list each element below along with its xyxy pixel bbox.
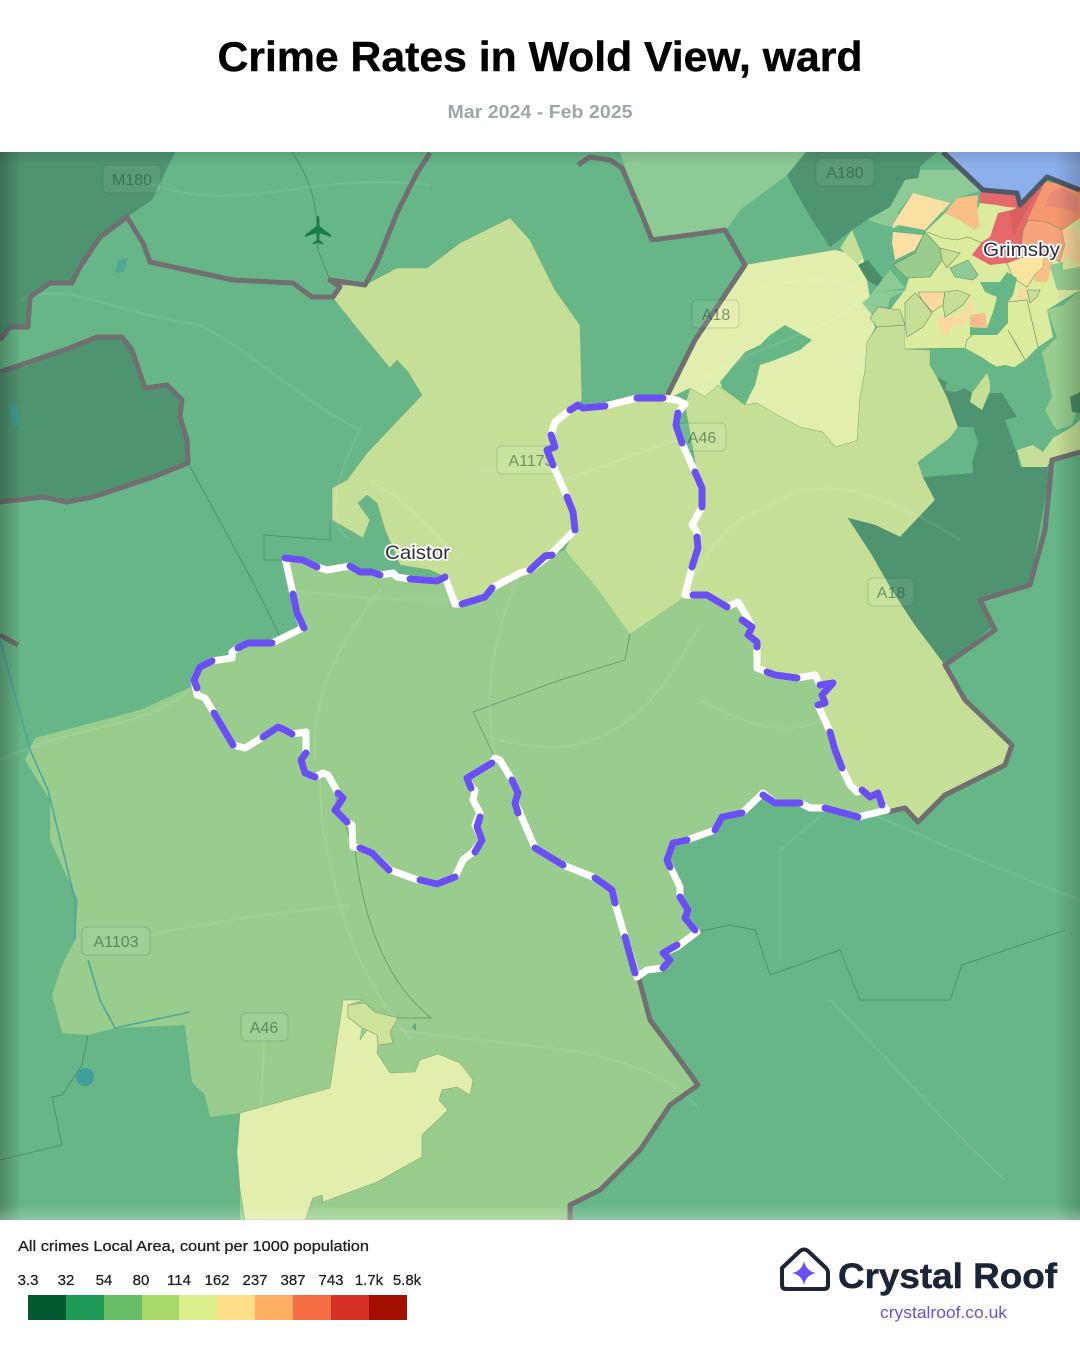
water bodies <box>8 258 416 1086</box>
administrative boundaries <box>0 152 1080 1220</box>
road label: A1103 <box>82 927 150 955</box>
sea <box>946 152 1080 200</box>
legend scale labels: 54 <box>96 1272 112 1289</box>
brand logo <box>782 1250 1057 1322</box>
ward: Wold View fill <box>194 550 887 977</box>
legend scale labels: 32 <box>58 1272 74 1289</box>
region: Caistor and north wold <box>332 218 582 605</box>
roads and thin boundaries <box>0 180 1080 1180</box>
region: south pale yellow <box>237 1000 473 1220</box>
region: pale yellow east of A46 <box>665 250 875 447</box>
road label: A18 north: A18 <box>702 307 730 324</box>
legend scale labels: 80 <box>133 1272 149 1289</box>
region: west darker area <box>0 337 188 502</box>
region: A180 darker area <box>787 152 937 247</box>
legend scale labels: 743 <box>318 1272 344 1289</box>
legend title: All crimes Local Area, count per 1000 population <box>18 1238 369 1255</box>
road label: A1103: A1103 <box>93 934 139 951</box>
ward: internal boundaries and roads <box>285 589 630 755</box>
region: south small olive cell <box>348 1003 398 1045</box>
ward: yellow-green northern lobe <box>547 398 702 634</box>
road label: A18 north <box>692 300 739 328</box>
road label: A46 north <box>678 423 726 451</box>
road label: A180: A180 <box>826 165 864 182</box>
icon: airport plane <box>305 216 331 244</box>
legend scale labels <box>18 1272 422 1289</box>
region: green blob <box>720 325 812 405</box>
legend scale labels: 5.8k <box>393 1272 422 1289</box>
road label: A46 north: A46 <box>688 430 716 447</box>
website url: crystalroof.co.uk <box>880 1304 1008 1322</box>
road label: A18 east <box>868 578 914 606</box>
subtitle: date range: Mar 2024 - Feb 2025 <box>448 102 632 122</box>
road label: A18 east: A18 <box>877 585 905 602</box>
road label: M180: M180 <box>112 172 152 189</box>
legend scale labels: 3.3 <box>18 1272 38 1289</box>
legend scale labels: 1.7k <box>355 1272 384 1289</box>
legend colour ramp <box>28 1295 407 1320</box>
region: north light green <box>620 152 805 240</box>
region: south-west and south-centre light green <box>25 685 698 1220</box>
place label: Caistor: Caistor <box>385 542 451 564</box>
road label: A1173: A1173 <box>508 453 554 470</box>
road label: A180 <box>816 158 874 186</box>
icon: house with star <box>782 1250 828 1289</box>
river <box>0 640 190 1028</box>
road label: A46 south: A46 <box>250 1020 278 1037</box>
legend scale labels: 387 <box>280 1272 306 1289</box>
road label: A46 south <box>241 1013 288 1041</box>
region: east yellow-green A18 <box>685 325 1012 822</box>
title: Crime Rates in Wold View, ward <box>218 33 862 80</box>
ward outline: white casing <box>194 398 887 977</box>
road label: M180 <box>103 165 161 193</box>
choropleth map panel <box>0 152 1080 1220</box>
ward outline: purple dashes <box>194 398 882 973</box>
place label: Grimsby: Grimsby <box>983 239 1060 261</box>
urban area: Grimsby <box>840 170 1080 477</box>
legend scale labels: 237 <box>242 1272 268 1289</box>
legend scale labels: 114 <box>167 1272 191 1289</box>
map edge vignette <box>0 152 1080 1220</box>
region: central dark wedge <box>848 377 1052 665</box>
brand name: Crystal Roof <box>838 1257 1057 1296</box>
road label: A1173 <box>496 446 554 474</box>
legend scale labels: 162 <box>204 1272 230 1289</box>
region: north-west darker area <box>0 152 175 340</box>
legend <box>18 1238 422 1320</box>
